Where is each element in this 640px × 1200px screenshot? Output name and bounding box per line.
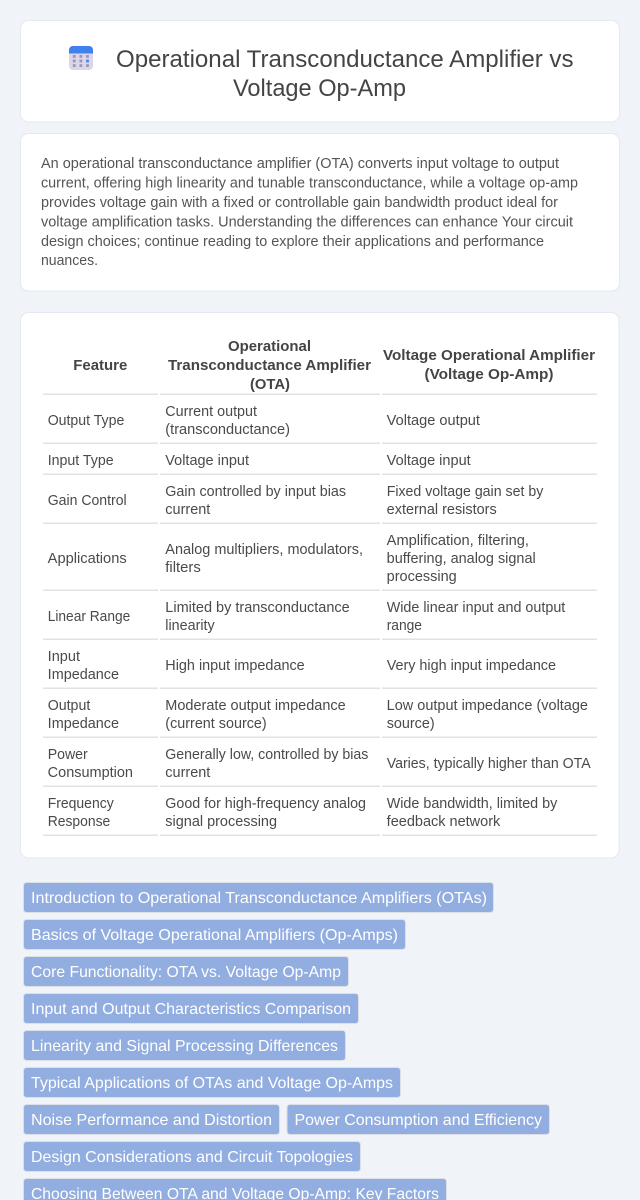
table header row — [73, 339, 595, 393]
row: linear range: Wide linear input and output — [387, 600, 565, 616]
tag: core functionality — [24, 956, 348, 986]
row: input type: Voltage input — [165, 453, 249, 469]
row: power consumption: Consumption — [48, 765, 133, 781]
panel: comparison table — [20, 312, 619, 858]
row: frequency response: Wide bandwidth, limited by — [387, 796, 558, 812]
row: applications: filters — [165, 560, 201, 576]
row: input impedance: Impedance — [48, 667, 119, 683]
tag: power: Power Consumption and Efficiency — [294, 1112, 542, 1129]
row: input impedance: High input impedance — [165, 658, 305, 674]
text block: summary: nuances. — [41, 253, 98, 269]
text block: summary: design choices; continue reading to explore their applications and performance — [41, 234, 544, 250]
row: linear range: Limited by transconductance — [165, 600, 350, 616]
row: frequency response: feedback network — [387, 814, 501, 830]
tag: input output — [24, 994, 358, 1024]
row: linear range: range — [387, 618, 422, 634]
row: power consumption: current — [165, 765, 210, 781]
row: power consumption — [48, 747, 591, 781]
tag: linearity: Linearity and Signal Processing Differences — [31, 1038, 338, 1055]
row: input impedance: Very high input impedance — [387, 658, 556, 674]
row: power consumption: Varies, typically higher than OTA — [387, 756, 591, 772]
row: input type: Voltage input — [387, 453, 471, 469]
text block: summary: provides voltage gain with a fixed or controllable gain bandwidth product ideal for — [41, 195, 558, 211]
row: frequency response — [48, 796, 558, 830]
tag: linearity — [24, 1030, 346, 1060]
text block: summary: An operational transconductance amplifier (OTA) converts input voltage to output — [41, 156, 559, 172]
row: output type: Output Type — [48, 413, 124, 429]
row: gain control: Gain controlled by input bias — [165, 484, 346, 500]
table row dividers — [43, 394, 597, 836]
row: output impedance: Impedance — [48, 716, 119, 732]
tag: choosing — [24, 1178, 446, 1200]
table header row: Feature — [73, 358, 127, 374]
row: output impedance: Low output impedance (voltage — [387, 698, 588, 714]
table header row: (OTA) — [250, 377, 290, 393]
row: gain control: Gain Control — [48, 493, 127, 509]
row: output impedance: (current source) — [165, 716, 267, 732]
row: power consumption: Generally low, controlled by bias — [165, 747, 368, 763]
row: linear range: linearity — [165, 618, 215, 634]
row: gain control: external resistors — [387, 502, 497, 518]
row: output type: Voltage output — [387, 413, 480, 429]
row: applications — [48, 533, 536, 585]
row: power consumption: Power — [48, 747, 88, 763]
panel: header — [20, 20, 620, 122]
row: output impedance: Moderate output impedance — [165, 698, 346, 714]
icon: calendar — [69, 46, 93, 70]
row: output type — [48, 404, 480, 438]
panel: summary paragraph — [20, 134, 620, 291]
row: applications: Amplification, filtering, — [387, 533, 529, 549]
row: input type: Input Type — [48, 453, 114, 469]
text block: summary — [41, 156, 578, 269]
tag: basics: Basics of Voltage Operational Amplifiers (Op-Amps) — [31, 927, 398, 944]
row: input impedance: Input — [48, 649, 80, 665]
table header row: Voltage Operational Amplifier — [383, 348, 595, 364]
tag: noise: Noise Performance and Distortion — [31, 1112, 272, 1129]
tag: applications — [24, 1068, 400, 1098]
tag: design — [24, 1142, 360, 1172]
row: output type: Current output — [165, 404, 257, 420]
row: output impedance — [48, 698, 588, 732]
row: applications: buffering, analog signal — [387, 551, 536, 567]
row: input impedance — [48, 649, 556, 683]
row: output impedance: Output — [48, 698, 90, 714]
row: linear range: Linear Range — [48, 609, 130, 625]
tag: introduction: Introduction to Operational Transconductance Amplifiers (OTAs) — [31, 890, 487, 907]
row: frequency response: Response — [48, 814, 110, 830]
row: linear range — [48, 600, 565, 634]
tag: introduction — [24, 882, 494, 912]
row: applications: Applications — [48, 551, 127, 567]
text block: summary: current, offering high linearity and tunable transconductance, while a voltage op-amp — [41, 176, 578, 192]
tag: power — [287, 1104, 550, 1134]
title: Voltage Op-Amp — [233, 75, 406, 102]
row: gain control: current — [165, 502, 210, 518]
row: applications: Analog multipliers, modulators, — [165, 542, 363, 558]
table header row: Transconductance Amplifier — [168, 358, 371, 374]
tag: input output: Input and Output Characteristics Comparison — [31, 1001, 351, 1018]
tag: design: Design Considerations and Circuit Topologies — [31, 1149, 353, 1166]
row: output impedance: source) — [387, 716, 435, 732]
table header row: (Voltage Op-Amp) — [424, 367, 554, 383]
title: Operational Transconductance Amplifier vs — [116, 46, 574, 73]
row: output type: (transconductance) — [165, 422, 290, 438]
topic tags — [24, 882, 550, 1200]
row: input type — [48, 453, 471, 469]
text block: summary: voltage amplification tasks. Understanding the differences can enhance Your circuit — [41, 214, 573, 230]
row: frequency response: signal processing — [165, 814, 277, 830]
tag: noise — [24, 1104, 280, 1134]
table header row: Operational — [228, 339, 311, 355]
row: gain control — [48, 484, 544, 518]
tag: core functionality: Core Functionality: OTA vs. Voltage Op-Amp — [31, 964, 341, 981]
row: frequency response: Good for high-frequency analog — [165, 796, 366, 812]
row: applications: processing — [387, 569, 457, 585]
tag: basics — [24, 920, 406, 950]
title — [116, 46, 574, 102]
row: gain control: Fixed voltage gain set by — [387, 484, 544, 500]
tag: applications: Typical Applications of OTAs and Voltage Op-Amps — [31, 1075, 393, 1092]
row: frequency response: Frequency — [48, 796, 114, 812]
